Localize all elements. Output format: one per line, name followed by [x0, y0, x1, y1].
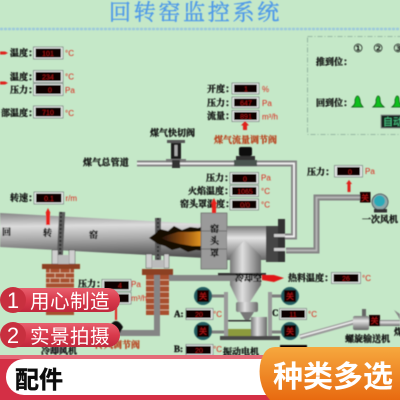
panel: cold air readings: 4 — [118, 283, 122, 290]
vibrating motors: 关 — [199, 326, 207, 336]
screw conveyor — [300, 309, 400, 344]
panel: gas valve readings: m³/h — [262, 112, 278, 122]
flame — [149, 226, 205, 252]
hood: 头 — [210, 235, 220, 246]
panel: burner readings: °C — [261, 187, 270, 196]
panel: temperature readings, upper left: 0 — [48, 88, 52, 94]
panel: temperature readings, upper left: 部温度： — [1, 107, 37, 118]
cold air duct — [118, 272, 284, 333]
panel: primary air fan: 压力： — [307, 166, 334, 177]
badge: 用心制造: 1 — [7, 288, 19, 313]
panel: gas valve readings — [207, 83, 278, 122]
panel: cold air readings: m³/h — [131, 294, 147, 303]
panel: burner readings: 1065 — [237, 189, 253, 196]
panel: burner readings: 0/0 — [240, 202, 250, 210]
badge: 实景拍摄 — [0, 322, 120, 348]
panel: gas valve readings: 流量： — [207, 110, 234, 121]
panel: burner readings: 火焰温度： — [188, 185, 233, 196]
vibrating motors — [194, 287, 299, 340]
panel: cold air readings: Pa — [131, 280, 141, 289]
panel: temperature readings, upper left: °C — [65, 49, 74, 58]
kiln drum: 转 — [43, 227, 52, 238]
pipe: gas main: 煤气总管道 — [82, 156, 129, 168]
panel: position status: ② — [373, 43, 383, 55]
brick pier 1 — [42, 250, 80, 315]
panel: temperature readings, upper left: 压力： — [10, 84, 37, 95]
panel: position status — [308, 36, 400, 134]
vibrating feeder platform — [220, 317, 280, 340]
panel: primary air fan: Pa — [365, 167, 375, 176]
readouts: motor temperatures: C: — [272, 308, 282, 318]
badge: 实景拍摄: 实景拍摄 — [30, 326, 110, 348]
bottom banner — [0, 355, 300, 400]
panel: position status: ① — [353, 43, 363, 55]
readouts: motor temperatures: 20 — [195, 312, 203, 319]
kiln speed reading: 0.1 — [44, 196, 54, 203]
readouts: motor temperatures — [174, 308, 317, 357]
panel: position status: 推到位： — [316, 56, 352, 67]
screw conveyor: 关 — [370, 316, 378, 326]
readouts: motor temperatures: 振动电机 — [223, 346, 259, 357]
panel: cold air readings: 冷风调节阀 — [95, 339, 140, 350]
panel: gas valve readings: 1 — [244, 86, 248, 94]
orange tag: 种类多选 — [273, 361, 393, 394]
readouts: motor temperatures: °C — [308, 310, 317, 319]
panel: burner readings: 窑头罩温度： — [180, 198, 234, 209]
cold air duct: 冷却空 — [235, 272, 262, 283]
icon: gas flow regulating valve: 煤气流量调节阀 — [213, 134, 277, 145]
readouts: motor temperatures: °C — [213, 310, 222, 319]
readout: hot material temperature — [288, 272, 371, 284]
vibrating motors: 关 — [286, 291, 294, 301]
panel: primary air fan: 关 — [361, 192, 369, 202]
panel: temperature readings, upper left: 温度： — [10, 71, 37, 82]
readout: hot material temperature: 26 — [342, 276, 350, 283]
kiln speed reading: r/m — [66, 194, 77, 203]
icon: cooling fan: 冷却风机 — [41, 345, 77, 356]
panel: temperature readings, upper left: 234 — [42, 74, 54, 82]
readouts: motor temperatures: A: — [174, 309, 184, 319]
badge: 用心制造: 用心制造 — [30, 291, 110, 313]
brick pier 2 — [142, 254, 173, 333]
kiln drum — [0, 212, 205, 260]
panel: gas valve readings: Pa — [262, 99, 272, 108]
vibrating motors: 关 — [199, 291, 207, 301]
panel: position status: 回到位： — [316, 97, 352, 108]
panel: burner readings: Pa — [261, 174, 271, 182]
hood: 窑 — [210, 223, 219, 234]
panel: cold air readings — [78, 278, 147, 350]
panel: primary air fan: 一次风机 — [362, 214, 398, 224]
badge: 实景拍摄: 2 — [7, 323, 19, 348]
panel: temperature readings, upper left: 101 — [42, 51, 54, 58]
readouts: motor temperatures: °C — [213, 345, 222, 354]
panel: temperature readings, upper left: Pa — [65, 86, 75, 95]
readouts: motor temperatures: 11 — [289, 312, 297, 319]
pipe: gas main — [82, 156, 294, 236]
panel: primary air fan: 0 — [348, 170, 352, 176]
readouts: motor temperatures: 20 — [195, 348, 203, 355]
hood: 罩 — [210, 248, 219, 258]
panel: burner readings: °C — [261, 200, 270, 210]
hood — [201, 198, 227, 269]
icon: gas flow regulating valve — [213, 121, 277, 166]
panel: temperature readings, upper left — [0, 47, 75, 118]
orange tag — [260, 347, 400, 400]
readout: hot material temperature: °C — [362, 274, 371, 283]
screw conveyor: 螺旋输送机 — [345, 333, 390, 344]
icon: gas quick-shut valve — [149, 127, 195, 168]
icon: gas quick-shut valve: 煤气快切阀 — [149, 127, 195, 138]
kiln drum: 窑 — [89, 229, 98, 240]
panel: gas valve readings: % — [262, 85, 269, 94]
panel: temperature readings, upper left: 710 — [42, 110, 54, 117]
panel: temperature readings, upper left: °C — [65, 109, 74, 118]
readouts: motor temperatures: B: — [174, 344, 183, 354]
panel: temperature readings, upper left: 温度： — [10, 47, 37, 58]
panel: burner readings — [180, 172, 271, 210]
readout: hot material temperature: 热料温度： — [288, 272, 333, 283]
panel: gas valve readings: 开度： — [207, 83, 234, 94]
bottom banner: 配件 — [15, 367, 63, 394]
panel: burner readings: 0 — [243, 176, 247, 184]
panel: burner readings: 压力： — [206, 172, 233, 183]
kiln discharge housing — [227, 219, 285, 262]
panel: temperature readings, upper left: °C — [65, 72, 74, 82]
kiln speed reading — [10, 192, 77, 225]
badge: 用心制造 — [0, 287, 120, 313]
panel: gas valve readings: 压力： — [207, 97, 234, 108]
kiln speed reading: 转速： — [10, 192, 37, 203]
cooler hopper — [230, 240, 261, 320]
panel: gas valve readings: 891 — [240, 114, 252, 121]
vibrating motors: 关 — [286, 326, 294, 336]
panel: cold air readings: 压力： — [78, 278, 105, 289]
panel: primary air fan — [286, 166, 398, 250]
kiln drum: 回 — [2, 227, 11, 237]
title: 回转窑监控系统 — [109, 0, 282, 25]
panel: gas valve readings: 647 — [240, 100, 252, 108]
